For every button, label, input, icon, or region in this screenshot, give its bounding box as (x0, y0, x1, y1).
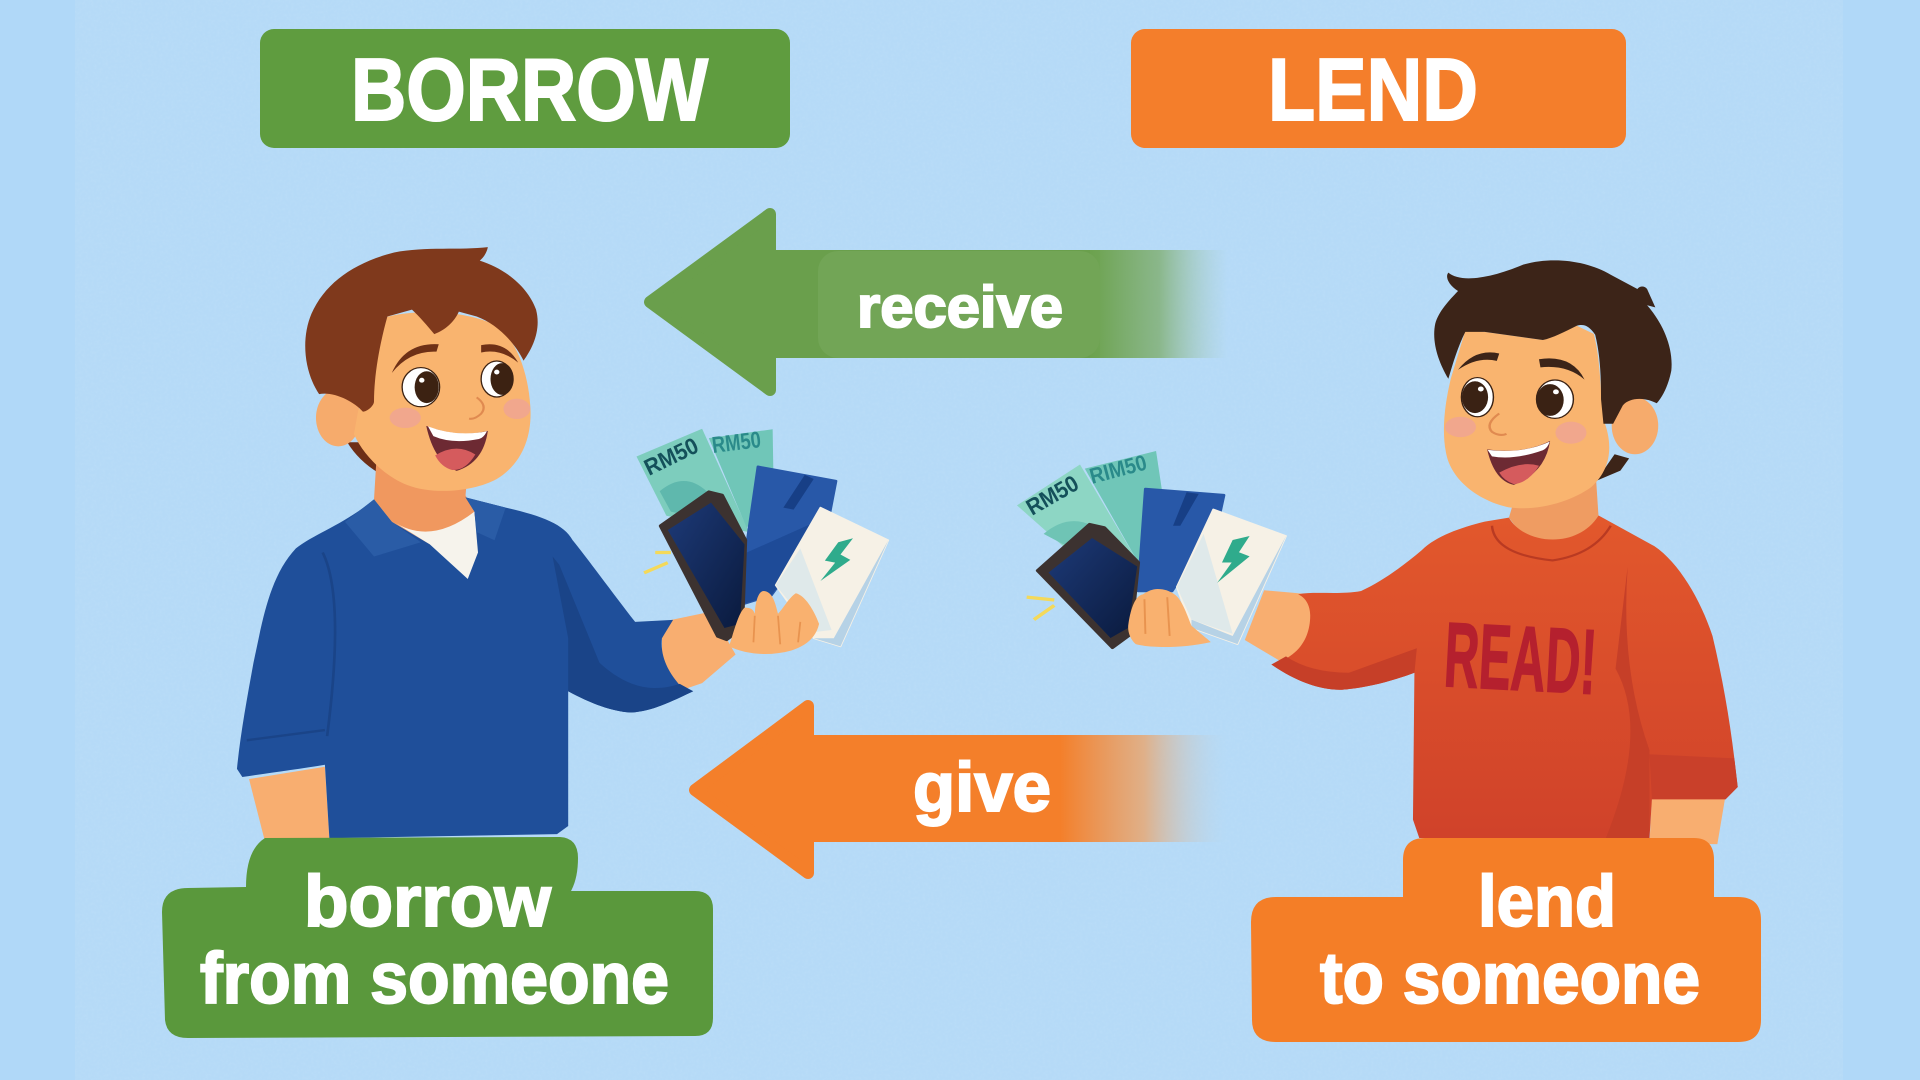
power bank (1177, 509, 1286, 644)
label bubble: lend to someone (1251, 838, 1761, 1042)
eyebrows (1458, 352, 1585, 380)
mouth (1487, 441, 1550, 485)
arrow: give: give (913, 748, 1051, 826)
arrow: receive: receive (857, 275, 1063, 340)
sleeve shading (553, 557, 693, 712)
blue wallet (1138, 489, 1224, 591)
sweater shading (1271, 567, 1649, 838)
finger lines (753, 616, 800, 644)
neck (1509, 481, 1599, 550)
banknote labels: borrower (640, 426, 762, 480)
face (354, 312, 531, 491)
arrow: give (695, 706, 1228, 873)
banknote 1 art (1044, 521, 1116, 554)
heading: BORROW: BORROW (351, 40, 708, 139)
label bubble: borrow from someone: borrow (304, 862, 552, 942)
left forearm (249, 767, 329, 840)
banknote 1 (636, 429, 749, 532)
sweater print: READ!: READ! (1442, 604, 1599, 714)
ear (316, 389, 361, 446)
eyebrows (392, 344, 518, 373)
sweater (237, 497, 693, 838)
label bubble: borrow from someone (162, 837, 713, 1038)
finger lines (1144, 597, 1170, 636)
rolled cuff (1649, 754, 1738, 799)
hair (305, 247, 538, 412)
hand (1128, 589, 1211, 647)
banknote labels: borrower: RM50 (640, 432, 702, 480)
white t-shirt (392, 512, 478, 579)
phone (1038, 525, 1138, 647)
heading: LEND (1131, 29, 1626, 148)
cheeks (390, 408, 421, 428)
blue wallet (738, 467, 836, 606)
hand (729, 591, 819, 654)
face (1444, 326, 1609, 508)
banknote 2 (1085, 451, 1162, 562)
sweater collar (345, 497, 506, 557)
person: borrower in blue sweater (237, 247, 888, 840)
banknote 1 art (660, 481, 724, 524)
sparks (644, 552, 671, 573)
nose (1490, 413, 1507, 435)
sparks (1027, 597, 1054, 620)
banknote labels: lender: RIM50 (1087, 450, 1149, 489)
banknote labels: lender: RM50 (1022, 470, 1083, 520)
back hair (1596, 454, 1629, 481)
label bubble: borrow from someone: from someone (200, 939, 669, 1019)
heading: LEND: LEND (1268, 40, 1478, 139)
banknote 1 (1017, 465, 1138, 562)
phone (661, 492, 745, 639)
heading: BORROW (260, 29, 790, 148)
hair (1434, 260, 1672, 424)
eyes (1461, 378, 1493, 417)
banknote labels: lender (1022, 450, 1149, 520)
arrow: receive (650, 214, 1228, 390)
neck (374, 463, 477, 544)
banknote labels: borrower: RM50 (710, 426, 762, 458)
eyes (402, 368, 440, 407)
right forearm (662, 612, 736, 689)
power bank (776, 508, 888, 646)
lower arm skin (1649, 795, 1726, 844)
nose (469, 397, 484, 419)
cheeks (1445, 417, 1476, 437)
collar line (1492, 526, 1611, 560)
forearm (1245, 590, 1320, 665)
lightning bolt (820, 538, 853, 581)
mouth (426, 426, 488, 471)
label bubble: lend to someone: lend (1478, 862, 1616, 942)
back hair (347, 442, 378, 473)
lightning bolt (1217, 536, 1250, 583)
left sleeve line (247, 552, 335, 740)
ear (1612, 397, 1658, 454)
person: lender in red sweater (1017, 260, 1738, 844)
banknote 2 (709, 429, 774, 528)
label bubble: lend to someone: to someone (1320, 939, 1700, 1019)
sweater (1271, 516, 1738, 838)
